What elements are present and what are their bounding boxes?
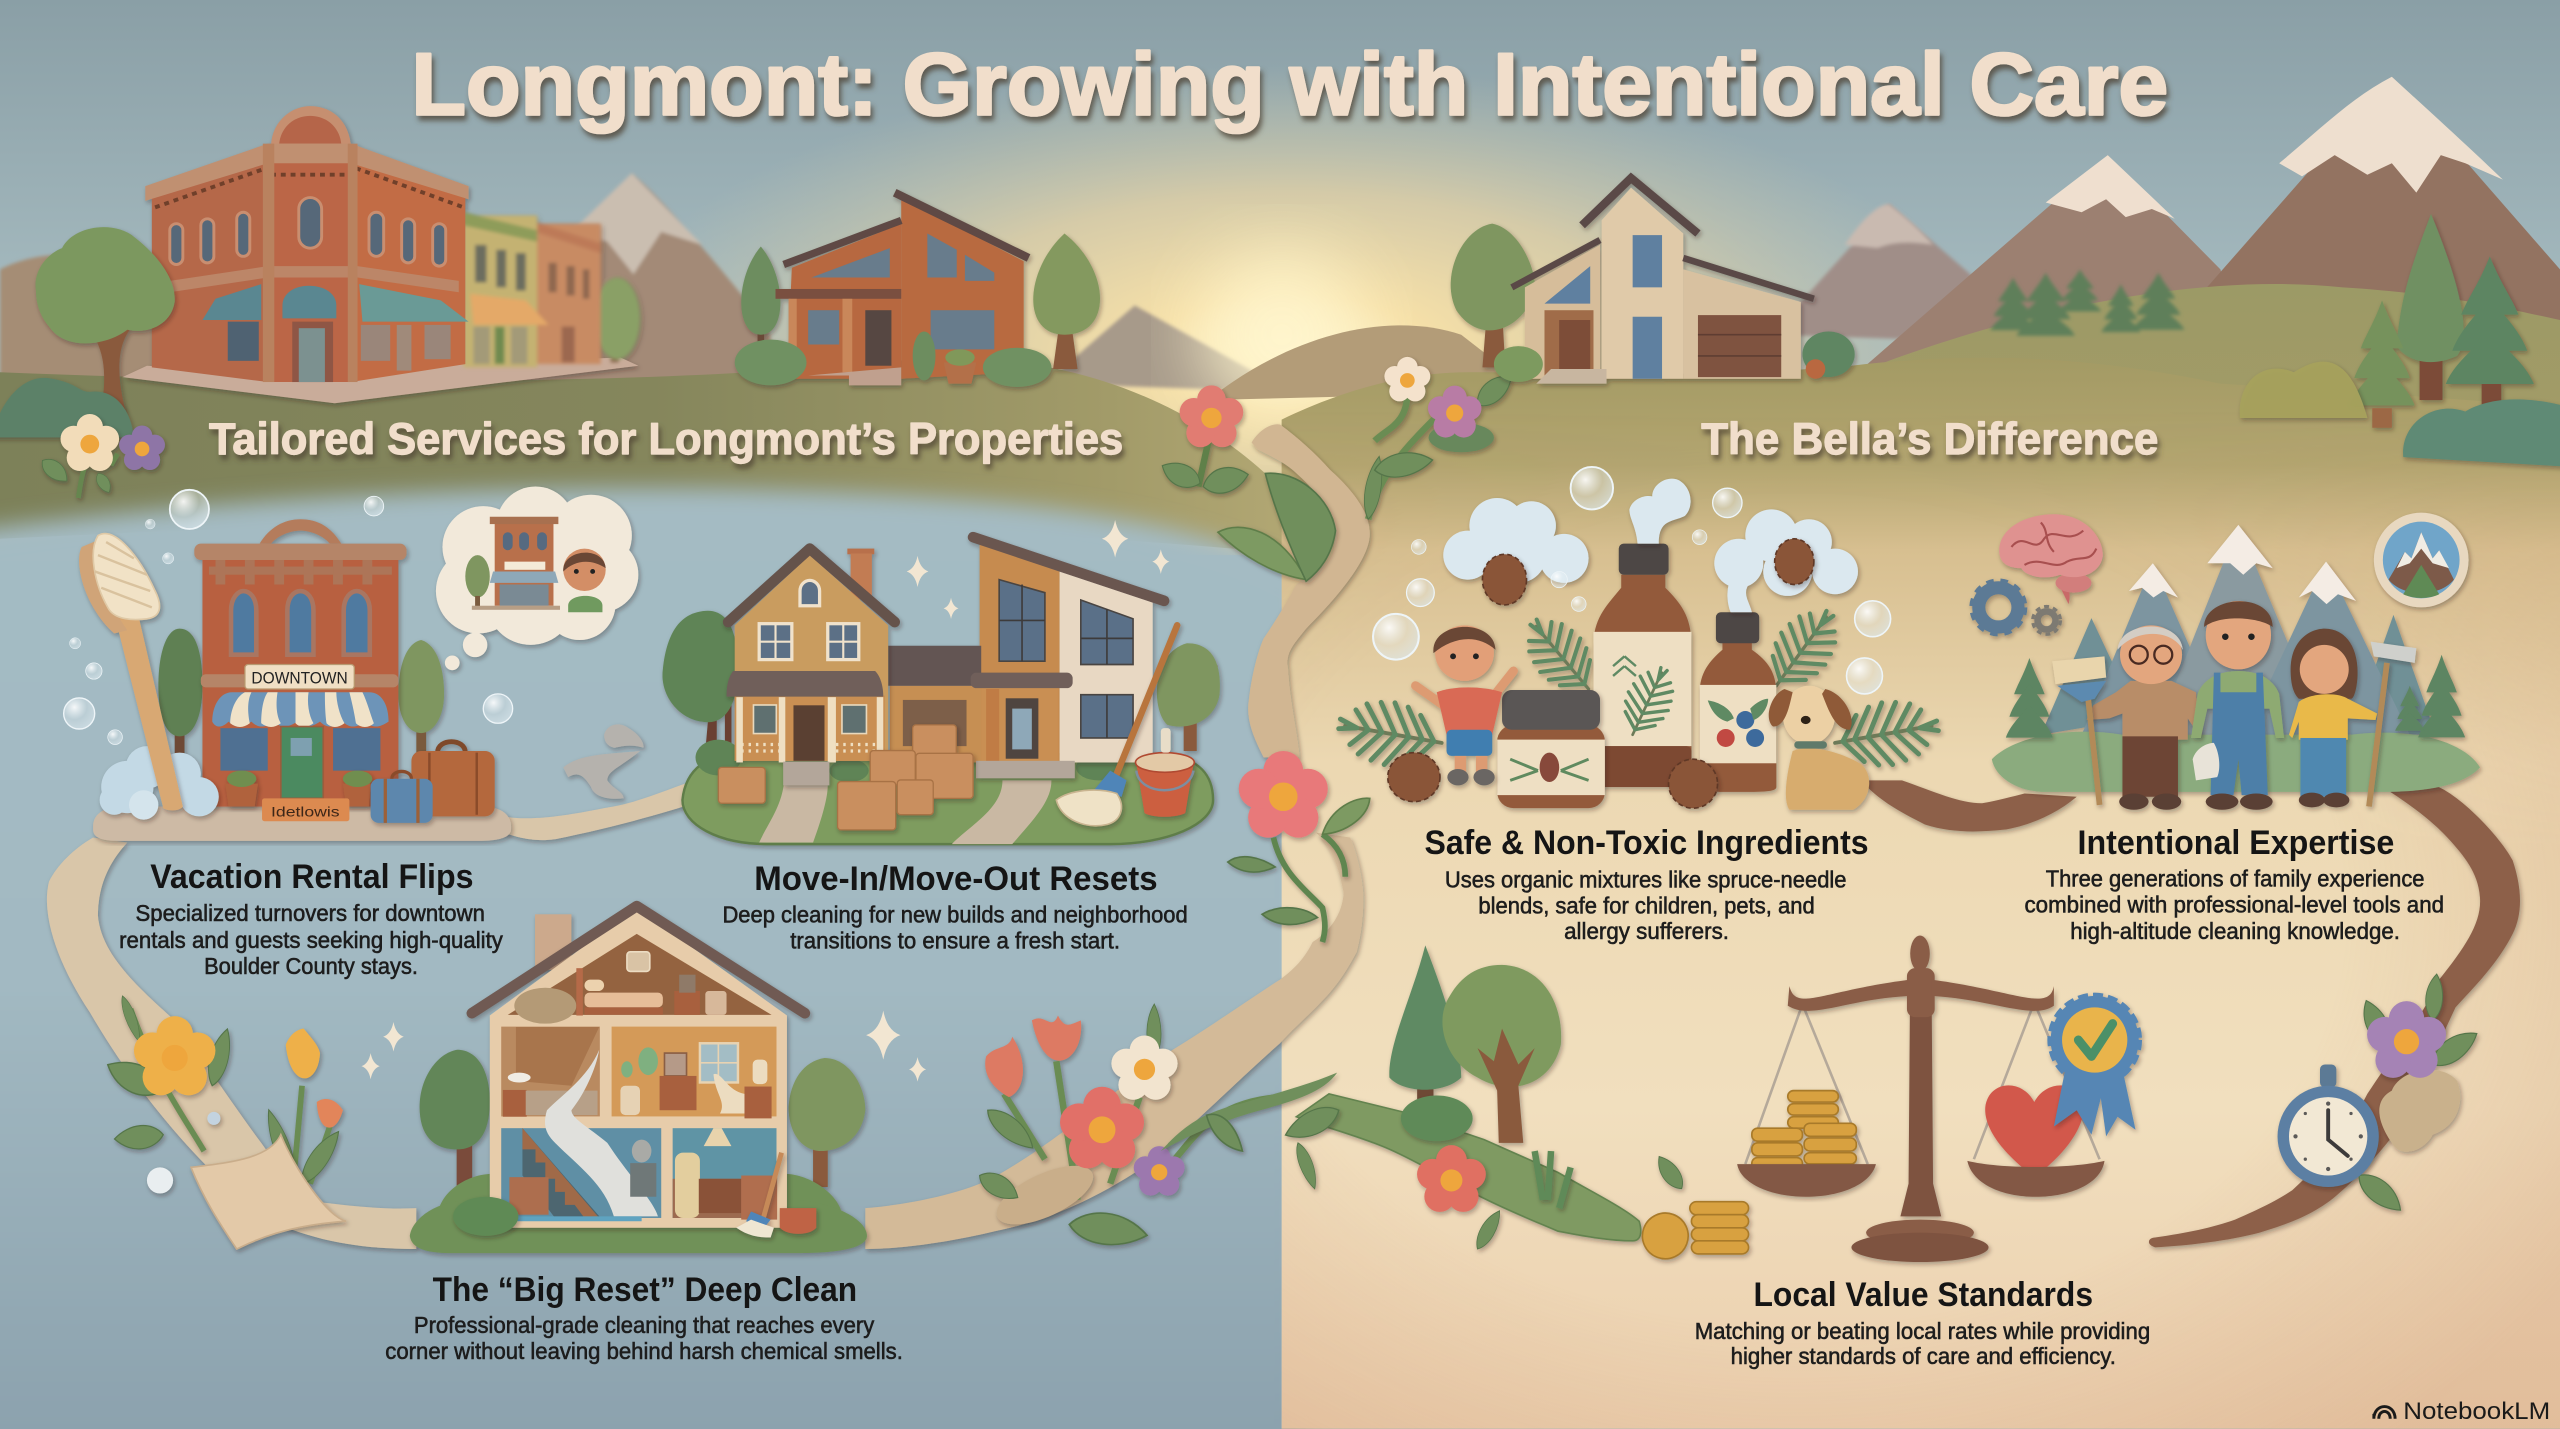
card text: local value: Matching or beating local rates while providing	[1695, 1318, 2150, 1344]
card text: intentional expertise: Three generations of family experience	[2046, 866, 2424, 892]
sign: DOWNTOWN	[251, 669, 348, 687]
mini person	[563, 549, 606, 612]
card text: big reset: Professional-grade cleaning that reaches every	[414, 1312, 875, 1338]
small bottle	[1700, 612, 1776, 792]
door mat	[262, 798, 349, 821]
striped awning	[212, 692, 389, 727]
jar	[1497, 690, 1605, 808]
card: move-in illustration	[662, 520, 1220, 844]
tools	[2052, 642, 2416, 807]
bushes	[696, 740, 1122, 782]
clock and purple flower	[2278, 973, 2483, 1218]
house shell	[472, 906, 805, 1228]
path: center lower road	[865, 833, 1363, 1249]
mop and bucket	[1056, 625, 1194, 826]
thought cloud	[436, 487, 638, 670]
brush	[79, 534, 183, 810]
flanking trees	[158, 629, 444, 769]
platform	[93, 807, 511, 841]
trees	[741, 233, 1100, 369]
shop windows and door	[220, 728, 268, 771]
green hills	[1992, 732, 2480, 792]
card text: local value	[1695, 1318, 2150, 1369]
section heading: difference: The Bella’s Difference	[1701, 415, 2158, 464]
puzzle shape	[2379, 1070, 2460, 1152]
trees	[420, 1050, 865, 1187]
sparkles	[361, 1011, 926, 1082]
awnings	[202, 284, 261, 320]
flowers lower right	[975, 1004, 1280, 1250]
card text: vacation rental	[119, 900, 503, 979]
mountain badge	[2374, 513, 2469, 607]
center path big leaves	[1218, 473, 1336, 581]
attic contents	[514, 952, 727, 1024]
center path flower with vine	[1228, 751, 1370, 942]
card: big reset cutaway house	[361, 906, 926, 1253]
sparkles	[907, 520, 1169, 619]
trees on green root	[1389, 945, 1561, 1143]
path: green root	[1296, 1094, 1641, 1241]
grandfather	[2087, 625, 2201, 810]
path: connector road	[503, 780, 694, 840]
path: brown road right	[2149, 784, 2520, 1247]
flowers lower left	[102, 994, 346, 1189]
small pines	[2006, 655, 2465, 738]
heart	[1985, 1085, 2083, 1177]
mountains left	[0, 173, 1290, 392]
root foliage	[1281, 1096, 1571, 1252]
notebooklm logo: NotebookLM	[2403, 1398, 2550, 1425]
sign	[245, 664, 354, 689]
brain	[1999, 514, 2103, 604]
mountains right	[1771, 77, 2560, 384]
stand	[1788, 936, 2054, 1262]
green island	[682, 754, 1213, 844]
sidewalk	[122, 358, 638, 403]
card heading: vacation rental: Vacation Rental Flips	[150, 858, 473, 896]
dog	[1769, 686, 1869, 810]
red flower at hill	[1157, 385, 1251, 498]
mountains	[2041, 525, 2436, 735]
big bottle	[1593, 544, 1691, 787]
steam clouds	[1443, 479, 1858, 612]
trees	[662, 611, 1220, 751]
card heading: intentional expertise: Intentional Expertise	[2078, 824, 2394, 862]
shop building	[194, 519, 407, 807]
card text: big reset: corner without leaving behind harsh chemical smells.	[385, 1338, 903, 1364]
card heading: intentional expertise	[2024, 824, 2444, 944]
hills	[1812, 284, 2560, 539]
foam	[100, 746, 219, 820]
small pines on hill	[1990, 269, 2184, 336]
path: brown road middle	[1861, 780, 2077, 831]
upper right room	[620, 1043, 772, 1118]
card heading: vacation rental	[119, 858, 503, 979]
card heading: safe ingredients: Safe & Non-Toxic Ingredients	[1424, 824, 1869, 862]
sun glow	[1200, 253, 1363, 416]
lower right items	[675, 1128, 777, 1220]
card heading: big reset: The “Big Reset” Deep Clean	[433, 1271, 857, 1309]
card text: move-in: Deep cleaning for new builds and neighborhood	[722, 901, 1188, 927]
card text: big reset	[385, 1312, 903, 1364]
pine branches	[1334, 597, 1943, 774]
lower vine and leaf	[1161, 1073, 1337, 1151]
white cloth	[2193, 743, 2219, 780]
background scenery	[0, 0, 2560, 555]
card heading: local value: Local Value Standards	[1753, 1276, 2093, 1314]
card text: move-in: transitions to ensure a fresh start.	[790, 928, 1120, 954]
pans	[1737, 1161, 2104, 1197]
grey splash	[563, 724, 644, 799]
beige house top right	[1451, 178, 1855, 384]
upper left room	[503, 1027, 599, 1117]
card text: move-in	[722, 901, 1188, 954]
bubbles	[64, 490, 513, 744]
bushes far right	[2240, 362, 2560, 467]
planters	[225, 771, 372, 807]
door mat: Idetlowis	[271, 803, 340, 819]
mini building	[465, 517, 560, 610]
gears	[1972, 581, 2060, 634]
card: vacation rental flips illustration	[64, 487, 644, 841]
card text: vacation rental: Specialized turnovers for downtown	[136, 900, 485, 926]
card text: safe ingredients	[1445, 866, 1847, 944]
cleaning tools	[453, 1153, 816, 1238]
card: safe ingredients illustration	[1334, 467, 1943, 810]
card text: intentional expertise	[2024, 866, 2444, 944]
loose coins	[1636, 1152, 1749, 1265]
card text: safe ingredients: allergy sufferers.	[1564, 918, 1729, 944]
card text: local value: higher standards of care and efficiency.	[1731, 1343, 2116, 1369]
cloth	[191, 1135, 346, 1249]
card text: vacation rental: rentals and guests seeking high-quality	[119, 927, 503, 953]
card text: vacation rental: Boulder County stays.	[204, 953, 418, 979]
downtown brick building	[122, 106, 640, 403]
card heading: move-in	[722, 860, 1188, 954]
white bubbles	[147, 1112, 220, 1193]
coin stacks	[1752, 1091, 1856, 1176]
card: intentional expertise illustration	[1972, 513, 2480, 810]
card text: safe ingredients: blends, safe for children, pets, and	[1478, 892, 1815, 918]
boxes	[718, 725, 973, 830]
card heading: big reset	[385, 1271, 903, 1364]
doors and lower windows	[228, 322, 451, 382]
modern house	[888, 537, 1164, 778]
suitcases	[371, 742, 495, 823]
card text: intentional expertise: high-altitude cleaning knowledge.	[2070, 918, 2400, 944]
stem flowers top right	[1360, 357, 1518, 520]
father	[2191, 601, 2284, 810]
balance scale	[1737, 936, 2139, 1262]
right beige panel	[1282, 358, 2560, 1429]
pinecones	[1388, 539, 1814, 808]
bubbles	[1373, 467, 1891, 694]
woman	[2289, 629, 2377, 807]
card heading: safe ingredients	[1424, 824, 1869, 944]
walkways	[759, 780, 1051, 844]
upper windows	[170, 198, 446, 266]
chimney	[535, 914, 571, 970]
annex buildings	[464, 212, 601, 367]
card text: intentional expertise: combined with professional-level tools and	[2024, 892, 2444, 918]
stairs and foam	[522, 1050, 658, 1218]
lower left items	[509, 1140, 656, 1221]
gabled house	[727, 549, 895, 785]
big pines right	[2349, 214, 2534, 428]
modern house top middle	[735, 193, 1100, 387]
card heading: local value	[1695, 1276, 2150, 1369]
rosette badge	[2051, 996, 2139, 1136]
path: center upper road	[1248, 424, 1370, 758]
big left tree	[35, 227, 175, 411]
bushes and pot	[735, 340, 807, 385]
main block	[271, 106, 351, 147]
tree	[1451, 224, 1535, 367]
tree far right	[594, 278, 640, 362]
left blue panel	[0, 488, 1306, 1429]
flowers left	[37, 414, 165, 498]
card heading: move-in: Move-In/Move-Out Resets	[754, 860, 1158, 898]
ground	[410, 1174, 867, 1253]
stopwatch	[2278, 1064, 2379, 1187]
title: Longmont: Growing with Intentional Care	[411, 34, 2168, 133]
path: left tan road	[47, 838, 416, 1249]
bush far left	[0, 378, 134, 438]
section heading: services: Tailored Services for Longmont’s Properties	[209, 415, 1123, 464]
child	[1416, 625, 1513, 785]
strings	[1745, 1002, 2100, 1164]
card text: safe ingredients: Uses organic mixtures like spruce-needle	[1445, 866, 1847, 892]
